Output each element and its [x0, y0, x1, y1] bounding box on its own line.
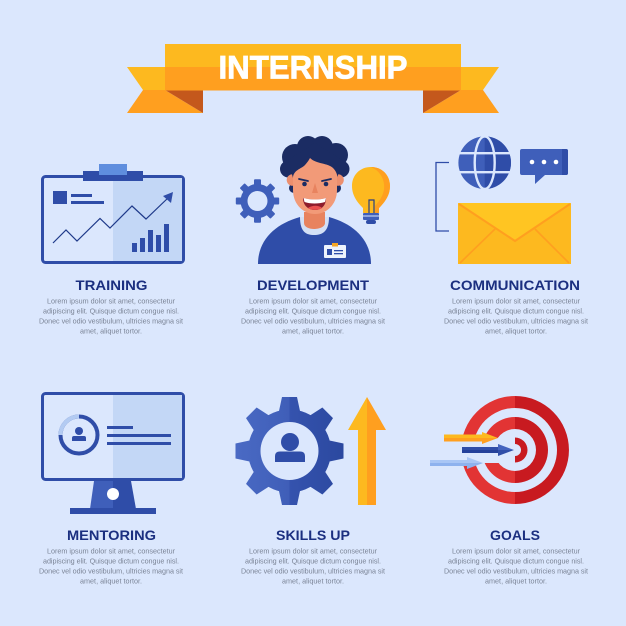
panel: development	[236, 136, 390, 336]
arrow: blue	[462, 444, 514, 456]
icon: target	[455, 396, 569, 504]
text block: training: adipiscing elit. Quisque dictum congue nisl.	[43, 306, 179, 316]
text block: mentoring: amet, aliquet tortor.	[80, 576, 142, 586]
text block: communication: amet, aliquet tortor.	[485, 326, 547, 336]
icon: envelope	[458, 203, 571, 264]
panel: goals	[430, 396, 588, 586]
text block: training: Lorem ipsum dolor sit amet, consectetur	[47, 296, 176, 306]
heading: mentoring: MENTORING	[67, 527, 156, 543]
heading: training: TRAINING	[76, 277, 148, 293]
text block: development	[241, 296, 385, 336]
text block: communication: Lorem ipsum dolor sit amet, consectetur	[452, 296, 581, 306]
icon: large gear with person	[236, 397, 344, 505]
text block: skills up: Lorem ipsum dolor sit amet, consectetur	[249, 546, 378, 556]
panel: mentoring	[39, 394, 184, 586]
icon: presentation board	[42, 164, 184, 262]
icon: bracket	[436, 162, 449, 231]
text block: communication: adipiscing elit. Quisque dictum congue nisl.	[448, 306, 584, 316]
arrow: light blue	[430, 457, 483, 469]
heading: communication: COMMUNICATION	[450, 277, 580, 293]
title: INTERNSHIP	[218, 50, 408, 86]
text block: development: amet, aliquet tortor.	[282, 326, 344, 336]
text block: mentoring: Lorem ipsum dolor sit amet, consectetur	[47, 546, 176, 556]
arrow: yellow	[444, 432, 498, 444]
text block: communication	[444, 296, 588, 336]
text block: mentoring: Donec vel odio vestibulum, ultricies magna sit	[39, 566, 183, 576]
heading: skills up: SKILLS UP	[276, 527, 350, 543]
icon: light bulb	[352, 167, 390, 224]
text block: development: Donec vel odio vestibulum, ultricies magna sit	[241, 316, 385, 326]
text block: goals: adipiscing elit. Quisque dictum congue nisl.	[448, 556, 584, 566]
text block: goals: Lorem ipsum dolor sit amet, consectetur	[452, 546, 581, 556]
text block: mentoring: adipiscing elit. Quisque dictum congue nisl.	[43, 556, 179, 566]
text block: goals: Donec vel odio vestibulum, ultricies magna sit	[444, 566, 588, 576]
text block: training	[39, 296, 183, 336]
text block: skills up: Donec vel odio vestibulum, ultricies magna sit	[241, 566, 385, 576]
text block: goals: amet, aliquet tortor.	[485, 576, 547, 586]
heading: development: DEVELOPMENT	[257, 277, 369, 293]
icon: intern portrait	[258, 136, 371, 264]
icon: globe	[456, 136, 514, 189]
icon: chat bubble	[520, 149, 568, 184]
panel: skills up	[236, 397, 386, 586]
text block: skills up	[241, 546, 385, 586]
text block: mentoring	[39, 546, 183, 586]
panel: training	[39, 164, 184, 336]
text block: development: adipiscing elit. Quisque dictum congue nisl.	[245, 306, 381, 316]
panel: communication	[436, 136, 588, 336]
text block: training: Donec vel odio vestibulum, ultricies magna sit	[39, 316, 183, 326]
arrow: up	[348, 397, 386, 505]
text block: goals	[444, 546, 588, 586]
text block: training: amet, aliquet tortor.	[80, 326, 142, 336]
text block: development: Lorem ipsum dolor sit amet, consectetur	[249, 296, 378, 306]
text block: skills up: amet, aliquet tortor.	[282, 576, 344, 586]
icon: monitor	[42, 394, 184, 514]
title banner	[127, 44, 499, 113]
icon: small gear	[236, 179, 279, 223]
heading: goals: GOALS	[490, 527, 540, 543]
text block: communication: Donec vel odio vestibulum, ultricies magna sit	[444, 316, 588, 326]
text block: skills up: adipiscing elit. Quisque dictum congue nisl.	[245, 556, 381, 566]
